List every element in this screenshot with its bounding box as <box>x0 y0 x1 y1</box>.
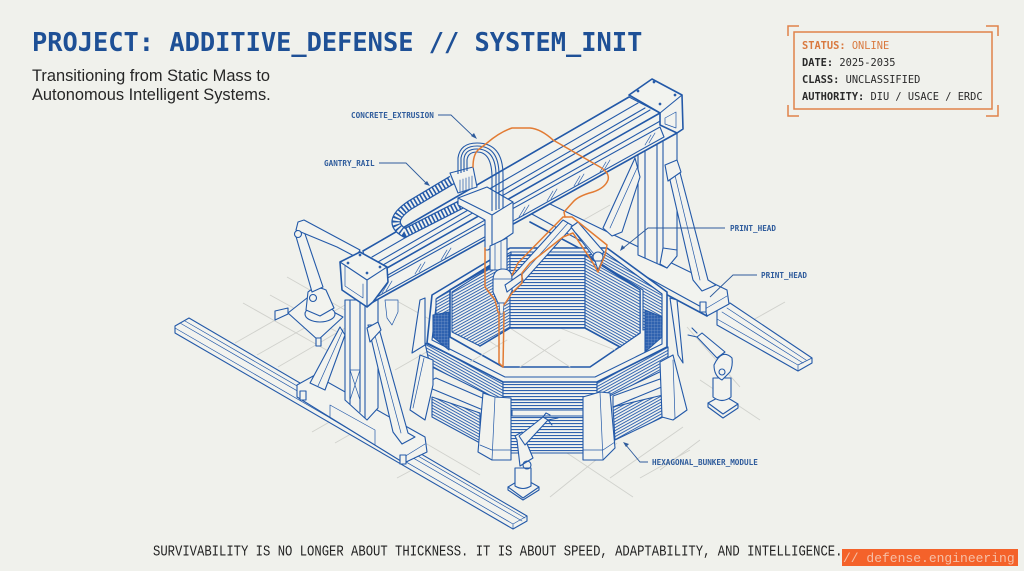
plinth strips <box>430 378 487 410</box>
status lines: AUTHORITY: DIU / USACE / ERDC <box>802 91 983 103</box>
beam cross braces <box>382 133 655 293</box>
orange cable <box>473 128 608 217</box>
rear left rim hatch <box>436 252 511 325</box>
inner back wall <box>510 255 585 328</box>
lower front wall <box>505 395 590 453</box>
inner left wall <box>452 255 510 346</box>
left column <box>345 300 378 420</box>
subtitle: Transitioning from Static Mass to <box>32 67 270 85</box>
left gantry support <box>297 300 427 464</box>
status panel <box>788 26 998 116</box>
right braces <box>603 158 716 291</box>
leader: print head upper <box>620 224 776 251</box>
closing statement: SURVIVABILITY IS NO LONGER ABOUT THICKNESS. IT IS ABOUT SPEED, ADAPTABILITY, AND INTELLIGENCE. <box>153 545 842 561</box>
leader: concrete extrusion: CONCRETE_EXTRUSION <box>351 111 434 120</box>
leader: hexagonal bunker module <box>623 442 758 467</box>
right gantry support and rail <box>530 125 812 371</box>
front recess strip <box>512 410 583 416</box>
leader: print head upper: PRINT_HEAD <box>730 224 776 233</box>
secondary arm <box>505 220 604 292</box>
subtitle <box>32 67 271 104</box>
upper right wall <box>597 347 668 402</box>
cable chain <box>396 180 462 233</box>
left end block <box>340 252 388 307</box>
status lines: STATUS: ONLINE <box>802 40 889 52</box>
title: PROJECT: ADDITIVE_DEFENSE // SYSTEM_INIT <box>32 27 642 57</box>
rim top surface <box>427 248 667 382</box>
lower right wall <box>613 395 663 440</box>
leader: concrete extrusion <box>351 111 477 139</box>
front buttress right <box>583 392 615 460</box>
gantry beam <box>363 97 677 302</box>
leader: print head lower <box>710 271 807 297</box>
print head <box>493 269 523 314</box>
arch cables <box>458 143 503 211</box>
right rail <box>717 303 812 371</box>
right small robot arm <box>688 328 738 418</box>
upper front wall <box>503 380 597 400</box>
leader: hexagonal bunker module: HEXAGONAL_BUNKER_MODULE <box>652 458 758 467</box>
source badge: // defense.engineering <box>843 551 1015 566</box>
print head carriage <box>450 167 513 270</box>
orange extruder outline <box>485 217 607 367</box>
subtitle: Autonomous Intelligent Systems. <box>32 86 271 104</box>
right end block <box>629 79 683 133</box>
left foot block <box>297 375 427 464</box>
leader: gantry rail: GANTRY_RAIL <box>324 159 375 168</box>
leader: gantry rail <box>324 159 430 186</box>
side buttress left <box>410 298 433 420</box>
leader: print head lower: PRINT_HEAD <box>761 271 807 280</box>
front buttress left <box>478 393 511 460</box>
left braces <box>310 322 415 444</box>
front small robot arm <box>508 413 558 500</box>
status lines <box>802 40 983 103</box>
right column <box>638 125 677 268</box>
status lines: CLASS: UNCLASSIFIED <box>802 74 920 86</box>
dark grid patches <box>433 312 449 350</box>
right base beam <box>530 203 729 316</box>
status lines: DATE: 2025-2035 <box>802 57 895 69</box>
left side robot arm <box>275 220 398 346</box>
cable connector <box>450 167 477 193</box>
lower left wall <box>432 397 480 443</box>
hexagonal bunker module <box>410 248 687 460</box>
inner right wall <box>585 255 640 347</box>
inner opening floor <box>450 255 640 367</box>
left rail <box>175 318 527 529</box>
rear right rim hatch <box>587 252 662 330</box>
upper left wall <box>425 343 503 402</box>
side buttress right <box>660 298 687 420</box>
